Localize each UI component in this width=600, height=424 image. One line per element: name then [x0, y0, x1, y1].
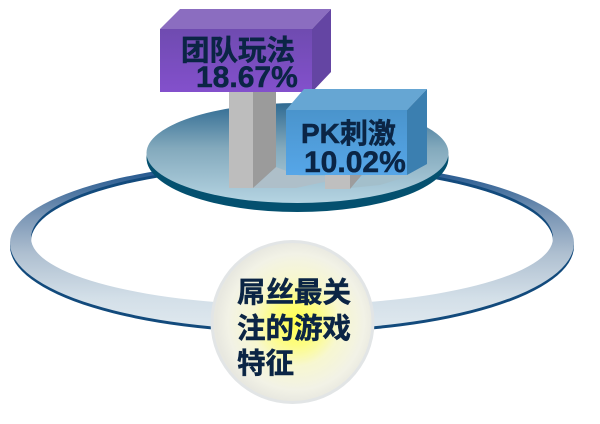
ring — [10, 161, 574, 333]
centre title: 特征 — [237, 348, 294, 380]
label: PK: PK刺激 — [301, 118, 396, 149]
column: PK — [325, 170, 366, 189]
platform disc — [146, 103, 448, 212]
centre circle — [210, 240, 374, 404]
centre title: 注的游戏 — [237, 313, 351, 345]
label: team play: 团队玩法 — [181, 35, 295, 67]
value: team play: 18.67% — [196, 61, 298, 94]
value: PK: 10.02% — [304, 146, 406, 179]
centre title: 屌丝最关 — [237, 277, 351, 309]
bar top: team play — [160, 9, 331, 92]
bar top: PK — [286, 89, 427, 175]
column: team play — [229, 92, 276, 188]
